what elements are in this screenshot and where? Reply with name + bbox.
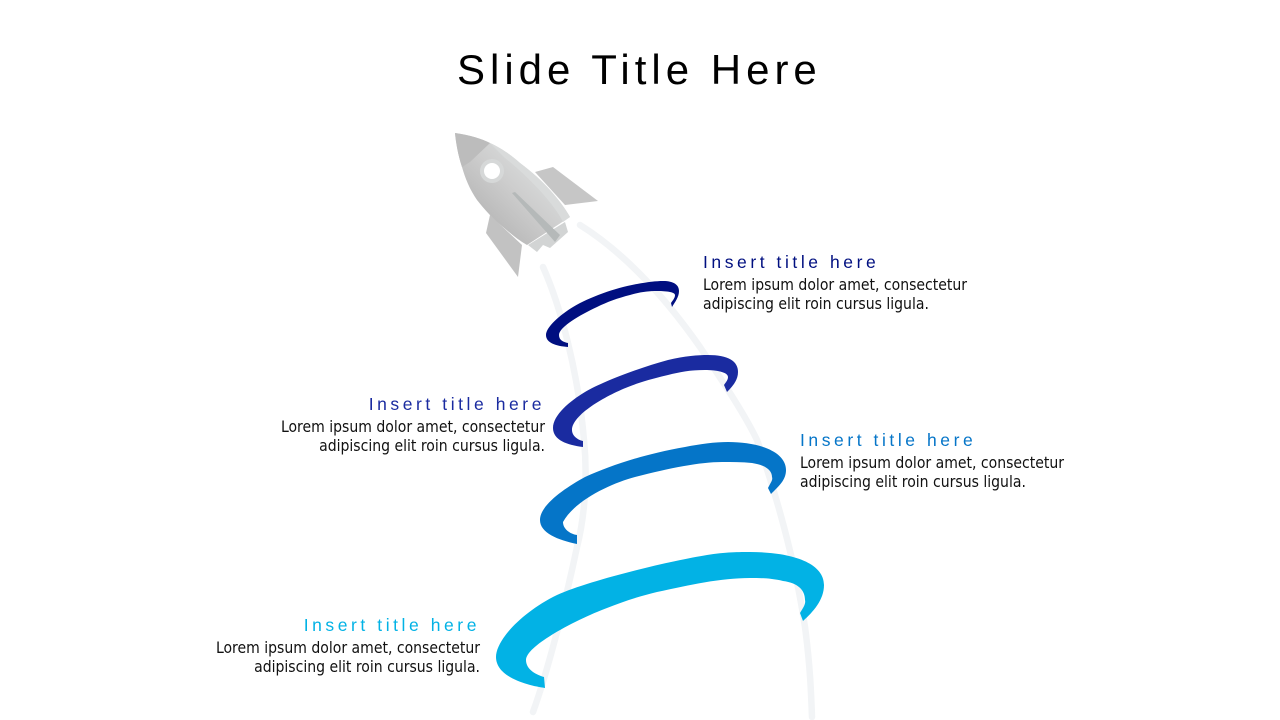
icon: rocket — [455, 133, 598, 277]
text block: step 3 — [800, 430, 1064, 491]
rocket body — [455, 133, 570, 245]
step 4 body — [216, 639, 480, 676]
step 2 body: Lorem ipsum dolor amet, consectetur — [281, 418, 545, 436]
step 2 body: adipiscing elit roin cursus ligula. — [319, 437, 545, 455]
text block: step 2 — [281, 394, 546, 455]
ring 3: mid blue — [540, 442, 786, 544]
step 2 heading: Insert title here — [369, 394, 545, 414]
text block: step 1 — [703, 252, 968, 313]
step 2 body — [281, 418, 546, 455]
title: Slide Title Here — [457, 46, 822, 93]
rocket fin: upper — [535, 167, 598, 205]
step 3 body: Lorem ipsum dolor amet, consectetur — [800, 454, 1064, 472]
rocket fin: lower — [486, 215, 522, 277]
step 1 body: Lorem ipsum dolor amet, consectetur — [703, 276, 967, 294]
step 3 body — [800, 454, 1064, 491]
step 4 heading: Insert title here — [304, 615, 480, 635]
step 3 heading: Insert title here — [800, 430, 976, 450]
text block: step 4 — [216, 615, 480, 676]
step 4 body: adipiscing elit roin cursus ligula. — [254, 658, 480, 676]
step 4 body: Lorem ipsum dolor amet, consectetur — [216, 639, 480, 657]
rocket porthole — [480, 159, 504, 183]
rocket nose — [455, 133, 490, 167]
rocket centre strut — [512, 192, 560, 242]
step 1 body: adipiscing elit roin cursus ligula. — [703, 295, 929, 313]
rocket highlight band — [490, 143, 570, 222]
rocket nozzle — [528, 222, 568, 252]
exhaust trail: left — [533, 267, 586, 712]
exhaust trail: right — [580, 225, 812, 717]
step 3 body: adipiscing elit roin cursus ligula. — [800, 473, 1026, 491]
step 1 heading: Insert title here — [703, 252, 879, 272]
ring 4: cyan — [496, 552, 824, 688]
step 1 body — [703, 276, 968, 313]
ring 2: royal blue — [553, 355, 738, 447]
ring 1: navy — [546, 281, 679, 347]
